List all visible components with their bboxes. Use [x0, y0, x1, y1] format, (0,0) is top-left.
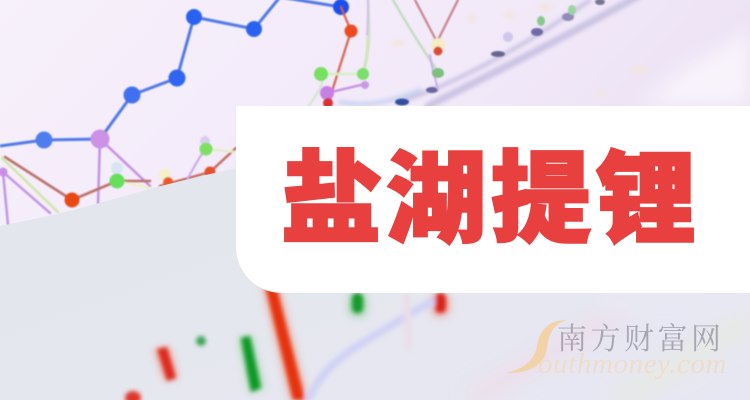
line chart: red, green and purple series [2, 7, 367, 225]
upper-right chart dots [431, 38, 445, 78]
candlestick halos [153, 285, 450, 400]
logo swoosh [506, 320, 567, 374]
line chart: upper-right curves [363, 0, 458, 90]
faint beige specks [392, 4, 650, 95]
lavender diagonal band [340, 0, 640, 106]
candlestick chart [125, 285, 446, 400]
watermark logo [506, 314, 727, 380]
logo Chinese name: 南方财富网 [557, 314, 724, 358]
upper-right pale sheet corner [640, 30, 750, 106]
logo domain: outhmoney.com [538, 348, 727, 380]
title banner [236, 106, 750, 293]
pale diagonal tints behind logo [470, 290, 750, 400]
line chart: blue series [0, 0, 349, 148]
lower grey sheet [0, 120, 750, 400]
title text: 盐湖提锂 [281, 144, 701, 256]
line chart: coloured markers [0, 24, 369, 208]
small markers on band [395, 0, 605, 106]
